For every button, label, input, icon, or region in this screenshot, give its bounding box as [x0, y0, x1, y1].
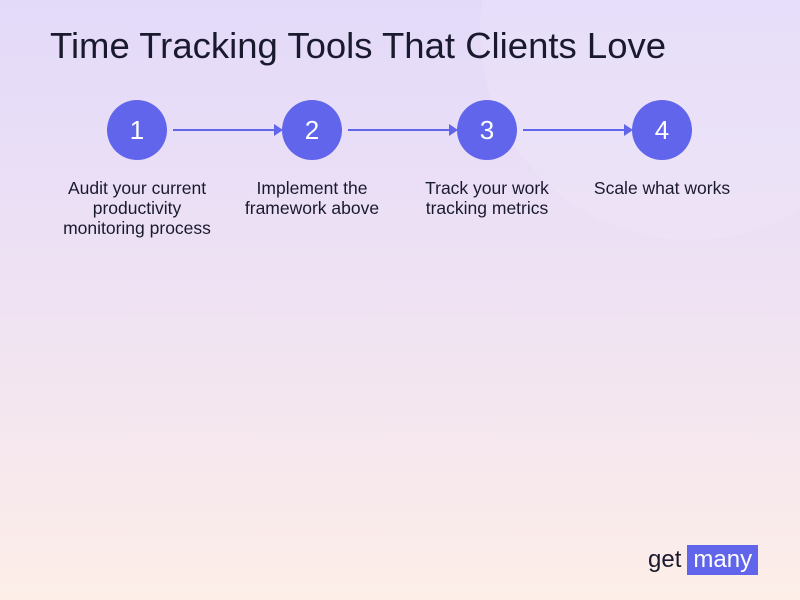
arrow 1 to 2 — [173, 129, 277, 131]
arrow 2 to 3 — [348, 129, 452, 131]
step 4 text: Scale what works — [594, 178, 730, 198]
step 4 circle: 4 — [655, 115, 669, 145]
step 1 circle: 1 — [130, 115, 144, 145]
title: Time Tracking Tools That Clients Love — [50, 25, 666, 66]
step 1 circle — [107, 100, 167, 160]
logo — [648, 545, 758, 575]
step 3 text: Track your work tracking metrics — [425, 178, 549, 218]
step 1 text: Audit your current productivity monitoring process — [63, 178, 211, 238]
logo: many — [693, 546, 752, 573]
arrow 3 to 4 — [523, 129, 627, 131]
logo: get — [648, 546, 681, 573]
step 2 circle — [282, 100, 342, 160]
step 3 circle: 3 — [480, 115, 494, 145]
step 2 circle: 2 — [305, 115, 319, 145]
step 3 circle — [457, 100, 517, 160]
step 4 circle — [632, 100, 692, 160]
step 2 text: Implement the framework above — [245, 178, 379, 218]
